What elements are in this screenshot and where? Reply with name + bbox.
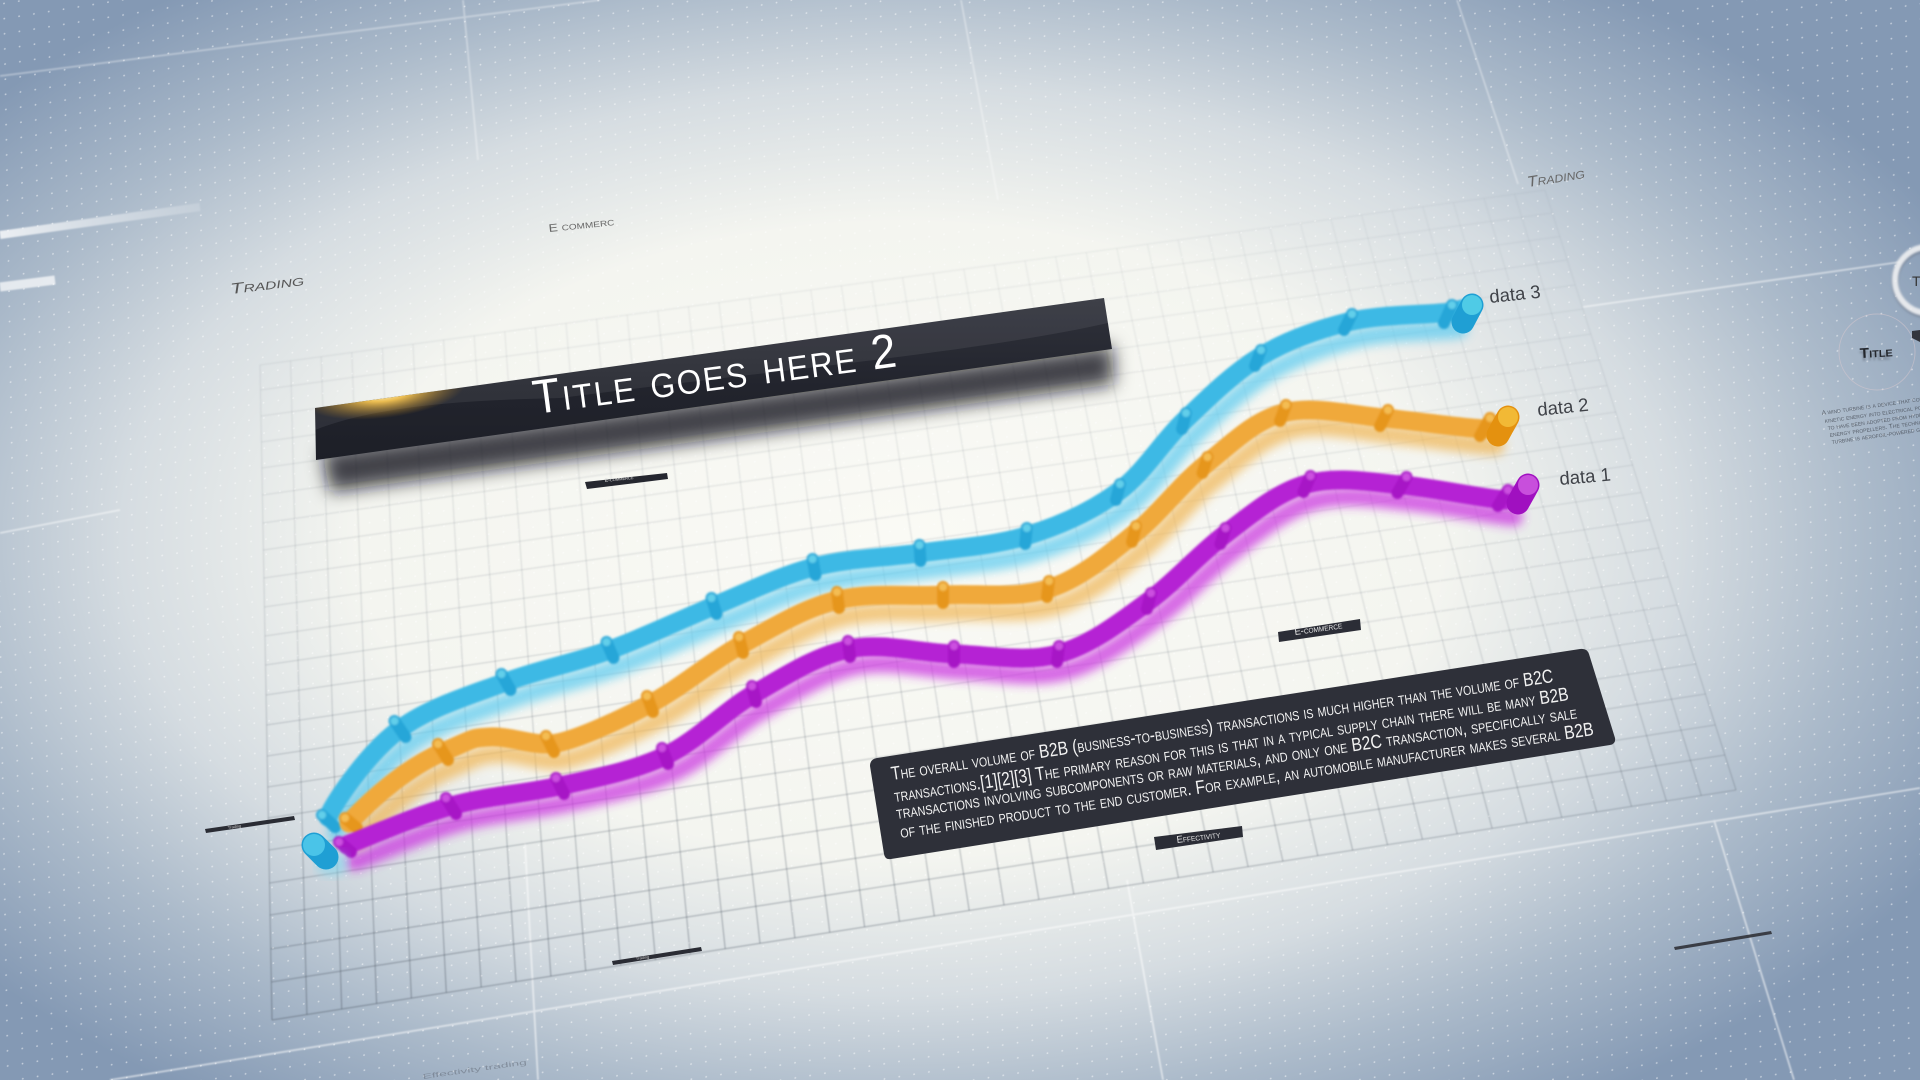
circle: title: Title <box>1859 343 1893 361</box>
line chart <box>314 305 1528 876</box>
title banner <box>303 298 1114 492</box>
panel text line 4: of the finished product to the end customer. For example, an automobile manufacturer makes several B2B <box>899 719 1595 843</box>
circle: title <box>1839 314 1915 390</box>
flat tag: left <box>205 816 295 833</box>
flat tag: bottom <box>612 947 702 965</box>
end cylinder: purple <box>1518 485 1528 503</box>
panel text line 2: transactions.[1][2][3] The primary reason for this is that in a typical supply chain there will be many B2B <box>893 684 1570 807</box>
end cylinder: orange <box>1498 417 1508 435</box>
flat tag: bottom: Trading <box>635 954 649 961</box>
start cylinder: cyan <box>314 845 348 876</box>
series label: data 1: data 1 <box>1559 464 1612 489</box>
line reflections <box>336 329 1514 862</box>
tag: Effectivity <box>1154 826 1243 850</box>
series: data 3 cyan <box>322 305 1466 827</box>
small tag: E-commerce flat: E-commerce <box>605 475 634 484</box>
flat tag: left: Trading <box>227 823 241 830</box>
flat tag: right <box>1674 931 1772 950</box>
series label: data 3: data 3 <box>1488 281 1542 307</box>
text panel <box>870 649 1615 859</box>
tag: E-commerce: E-commerce <box>1294 620 1343 638</box>
end cylinder: cyan <box>1463 305 1472 322</box>
tag: E-commerce <box>1278 619 1361 642</box>
right side panel <box>1821 247 1920 446</box>
label: E-commerce top: E commerc <box>548 216 615 235</box>
title text: Title goes here 2 <box>530 324 901 425</box>
panel text line 1: The overall volume of B2B (business-to-business) transactions is much higher than the volume of B2C <box>890 666 1555 785</box>
circle: upper title <box>1895 247 1920 315</box>
series label: data 2: data 2 <box>1536 394 1590 420</box>
label: Trading left: Trading <box>229 272 306 298</box>
grid <box>260 190 1736 1020</box>
small dark tag <box>1912 330 1920 342</box>
panel text line 3: transactions involving subcomponents or raw materials, and only one B2C transaction, specifically sale <box>895 702 1579 824</box>
tag: Effectivity: Effectivity <box>1176 830 1221 846</box>
circle: title: Title <box>1859 346 1891 364</box>
paragraph <box>1821 390 1920 446</box>
label: Trading right: Trading <box>1526 165 1586 191</box>
small tag: E-commerce flat <box>585 473 668 489</box>
series: data 1 purple <box>339 476 1525 852</box>
series: data 2 orange <box>345 405 1507 828</box>
